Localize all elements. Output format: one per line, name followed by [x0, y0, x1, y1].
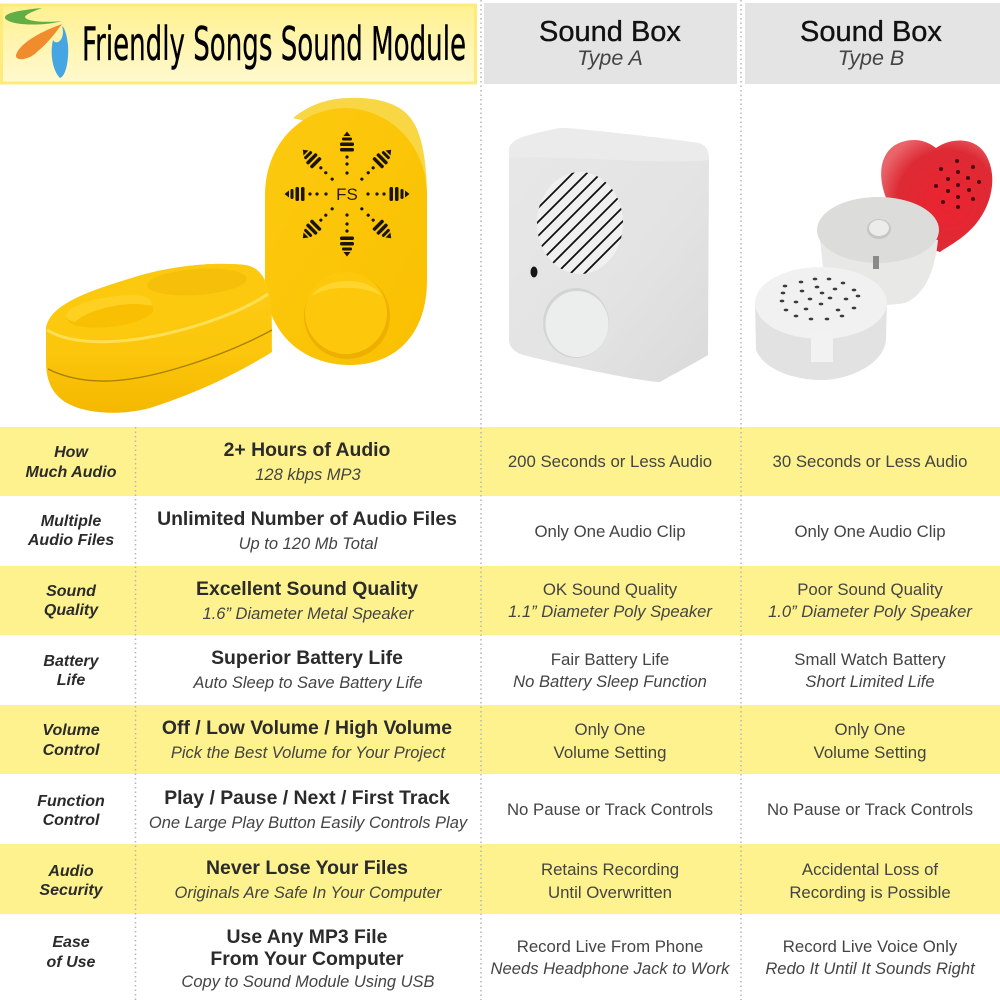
row: how much audio: 30 Seconds or Less Audio [773, 452, 967, 471]
row: battery life: No Battery Sleep Function [513, 672, 707, 691]
yellow module lying flat [46, 264, 272, 413]
row: multiple audio files: Only One Audio Clip [534, 522, 686, 541]
row: function control: Function [37, 793, 105, 810]
row: ease of use: Redo It Until It Sounds Right [765, 959, 976, 978]
row: volume control: Volume Setting [814, 743, 926, 762]
row: volume control: Only One [835, 720, 905, 739]
yellow module standing upright: FS [336, 185, 358, 204]
row: audio security: Originals Are Safe In Your Computer [175, 884, 443, 902]
row: volume control: Only One [575, 720, 645, 739]
row: battery life: Battery [43, 653, 100, 670]
title banner [2, 5, 476, 83]
row: multiple audio files: Unlimited Number of Audio Files [157, 508, 457, 530]
header: Sound Box Type A [484, 3, 737, 84]
row: sound quality: 1.6” Diameter Metal Speaker [203, 605, 415, 623]
row: battery life: Auto Sleep to Save Battery Life [192, 674, 423, 692]
header: Sound Box Type B [745, 3, 1000, 84]
round white button [543, 288, 609, 358]
row: audio security: Audio [47, 863, 94, 880]
microphone hole [530, 266, 538, 278]
row: sound quality: OK Sound Quality [543, 580, 678, 599]
white speaker disc [755, 267, 887, 380]
row: audio security: Accidental Loss of [802, 860, 938, 879]
row: audio security: Recording is Possible [789, 883, 951, 902]
row: ease of use: Ease [52, 934, 90, 951]
row: audio security: Until Overwritten [548, 883, 672, 902]
row: volume control: Pick the Best Volume for Your Project [171, 744, 447, 762]
product: Friendly Songs yellow sound modules [46, 98, 427, 413]
row: ease of use: Record Live Voice Only [783, 937, 958, 956]
row: battery life: Small Watch Battery [794, 650, 946, 669]
row: ease of use: Needs Headphone Jack to Work [491, 959, 730, 978]
row: audio security: Retains Recording [541, 860, 679, 879]
header: Sound Box Type B: Sound Box [800, 16, 942, 48]
row: multiple audio files: Audio Files [27, 532, 114, 549]
row: how much audio: Much Audio [26, 464, 117, 481]
red heart sound box [881, 140, 992, 252]
row: how much audio: 200 Seconds or Less Audio [508, 452, 712, 471]
row: ease of use: From Your Computer [210, 948, 404, 970]
product: Sound Box Type B heart and discs [755, 140, 992, 380]
row: volume control: Off / Low Volume / High Volume [162, 717, 452, 739]
round yellow button [304, 272, 390, 359]
product: Sound Box Type A white box [509, 116, 709, 382]
row: how much audio: 2+ Hours of Audio [224, 439, 391, 461]
row: sound quality [0, 566, 1000, 635]
row: volume control: Control [43, 742, 100, 759]
row: function control: No Pause or Track Controls [767, 800, 973, 819]
icon: FS star speaker pattern [284, 132, 410, 256]
row: battery life: Short Limited Life [805, 672, 935, 691]
header: Sound Box Type A: Type A [577, 46, 643, 70]
grey open disc [817, 197, 939, 305]
row: sound quality: 1.1” Diameter Poly Speaker [508, 602, 713, 621]
row: how much audio: 128 kbps MP3 [255, 466, 362, 484]
row: ease of use [47, 926, 976, 991]
header: Sound Box Type A: Sound Box [539, 16, 681, 48]
row: multiple audio files [27, 508, 946, 553]
row: multiple audio files: Multiple [41, 513, 101, 530]
row: sound quality: Excellent Sound Quality [196, 578, 418, 600]
row: how much audio [0, 427, 1000, 496]
row: sound quality: Poor Sound Quality [797, 580, 943, 599]
row: audio security: Never Lose Your Files [206, 857, 408, 879]
row: function control: Control [43, 812, 100, 829]
row: function control: No Pause or Track Controls [507, 800, 713, 819]
row: ease of use: Copy to Sound Module Using USB [181, 973, 435, 991]
row: sound quality: Sound [46, 583, 97, 600]
header: Sound Box Type B: Type B [838, 46, 904, 70]
row: ease of use: of Use [47, 954, 96, 971]
row: volume control: Volume [42, 722, 100, 739]
row: audio security: Security [39, 882, 104, 899]
row: volume control: Volume Setting [554, 743, 666, 762]
icon: Friendly Songs logo [5, 8, 68, 78]
yellow module standing upright [265, 98, 427, 365]
row: battery life: Fair Battery Life [551, 650, 669, 669]
row: battery life [43, 647, 946, 692]
row: volume control [0, 705, 1000, 774]
row: multiple audio files: Up to 120 Mb Total [239, 535, 379, 553]
speaker grille [537, 172, 623, 274]
row: function control: One Large Play Button Easily Controls Play [149, 814, 469, 832]
row: battery life: Life [57, 672, 85, 689]
row: how much audio: How [54, 444, 89, 461]
row: ease of use: Use Any MP3 File [227, 926, 388, 948]
row: audio security [0, 844, 1000, 914]
title text: Friendly Songs Sound Module [82, 17, 466, 71]
row: battery life: Superior Battery Life [211, 647, 403, 669]
row: sound quality: 1.0” Diameter Poly Speaker [768, 602, 973, 621]
row: multiple audio files: Only One Audio Clip [794, 522, 946, 541]
row: function control: Play / Pause / Next / First Track [164, 787, 450, 809]
row: ease of use: Record Live From Phone [517, 937, 703, 956]
row: sound quality: Quality [44, 602, 99, 619]
row: function control [37, 787, 973, 832]
